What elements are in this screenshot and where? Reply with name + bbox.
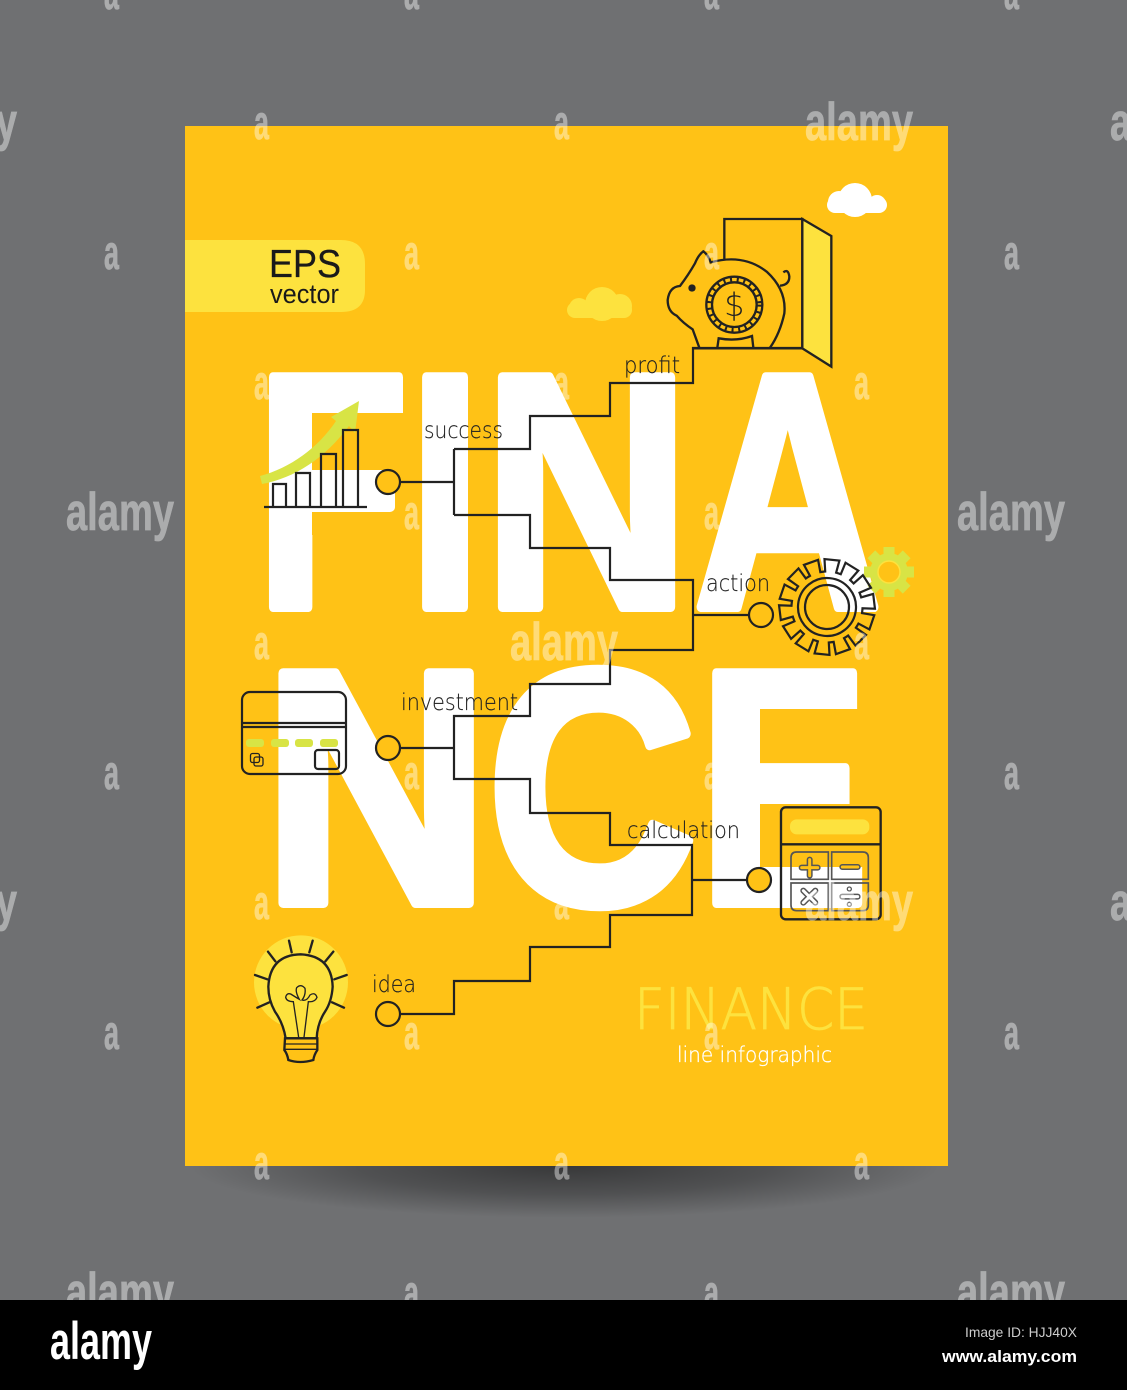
big word FINANCE first line [256, 304, 881, 678]
icon: bar chart with arrow [260, 401, 367, 507]
watermark stamps: a [404, 1007, 419, 1060]
watermark stamps: a [554, 877, 569, 930]
footer band: Image ID: HJJ40X [965, 1324, 1078, 1340]
node: investment [376, 736, 400, 760]
node: calculation [747, 868, 771, 892]
watermark stamps: a [254, 1137, 269, 1190]
watermark stamps: alamy [957, 1263, 1065, 1322]
watermark stamps: a [404, 487, 419, 540]
caption title: FINANCE: FINANCE [634, 977, 868, 1043]
icon: small lime gear [864, 547, 914, 597]
step line under pig [693, 345, 802, 352]
icon: door and piggy bank [668, 219, 831, 367]
watermark stamps: a [704, 747, 719, 800]
coin: $ [724, 286, 745, 324]
watermark stamps: a [554, 357, 569, 410]
EPS vector tag: EPS [269, 243, 341, 286]
node: action [749, 603, 773, 627]
watermark stamps: a [554, 97, 569, 150]
open door panel [802, 219, 831, 367]
EPS vector tag: vector [270, 279, 339, 309]
watermark stamps: a [254, 617, 269, 670]
icon: calculator [781, 807, 881, 919]
big word FINANCE second line: E [699, 600, 868, 974]
watermark stamps: a [104, 747, 119, 800]
node: idea [376, 1002, 400, 1026]
big word FINANCE first line: A [694, 305, 881, 678]
watermark stamps: a [104, 227, 119, 280]
door frame [724, 219, 802, 348]
cloud: white [827, 183, 887, 217]
watermark stamps: alamy [510, 613, 618, 672]
label: success: success [424, 418, 503, 444]
stair connector lines [400, 348, 802, 1014]
watermark stamps: a [554, 1137, 569, 1190]
icon: large line gear [774, 555, 880, 659]
watermark stamps: a [704, 227, 719, 280]
big word FINANCE second line [262, 600, 868, 974]
node: success [376, 470, 400, 494]
label: profit: profit [624, 353, 680, 379]
watermark stamps: a [404, 1267, 419, 1320]
big word FINANCE first line: I [408, 305, 482, 678]
watermark stamps: a [854, 1137, 869, 1190]
watermark stamps: a [254, 357, 269, 410]
watermark stamps: a [254, 97, 269, 150]
big word FINANCE first line: F [256, 306, 408, 678]
watermark stamps: a [1004, 747, 1019, 800]
cloud: yellow [567, 287, 632, 321]
footer band [0, 1300, 1127, 1390]
watermark stamps: a [704, 487, 719, 540]
watermark stamps: alamy [805, 93, 913, 152]
watermark stamps: alamy [957, 483, 1065, 542]
label: calculation: calculation [627, 818, 740, 844]
watermark stamps: a [404, 747, 419, 800]
watermark stamps: a [1004, 227, 1019, 280]
watermark stamps: alamy [66, 1263, 174, 1322]
icon: credit card [242, 692, 346, 774]
coin [706, 277, 762, 333]
watermark stamps: a [854, 617, 869, 670]
label: action: action [706, 571, 770, 597]
watermark stamps: a [404, 227, 419, 280]
label: idea: idea [372, 972, 416, 998]
EPS vector tag [185, 240, 365, 312]
watermark stamps: a [254, 877, 269, 930]
big word FINANCE second line: N [262, 601, 490, 974]
poster shadow [190, 1114, 940, 1218]
footer band: www.alamy.com [941, 1347, 1077, 1366]
big word FINANCE first line: N [483, 304, 690, 678]
watermark stamps: a [104, 1007, 119, 1060]
watermark stamps: a [1004, 1007, 1019, 1060]
watermark stamps: alamy [805, 873, 913, 932]
caption subtitle: line infographic [677, 1043, 832, 1067]
icon: light bulb [254, 935, 348, 1062]
label: investment: investment [401, 690, 518, 716]
yellow poster panel [185, 126, 948, 1166]
watermark stamps: a [704, 1267, 719, 1320]
watermark stamps: alamy [66, 483, 174, 542]
footer band: alamy [50, 1312, 152, 1371]
piggy body [668, 251, 785, 348]
big word FINANCE second line: C [487, 602, 697, 974]
watermark stamps: a [704, 1007, 719, 1060]
watermark stamps: a [854, 357, 869, 410]
